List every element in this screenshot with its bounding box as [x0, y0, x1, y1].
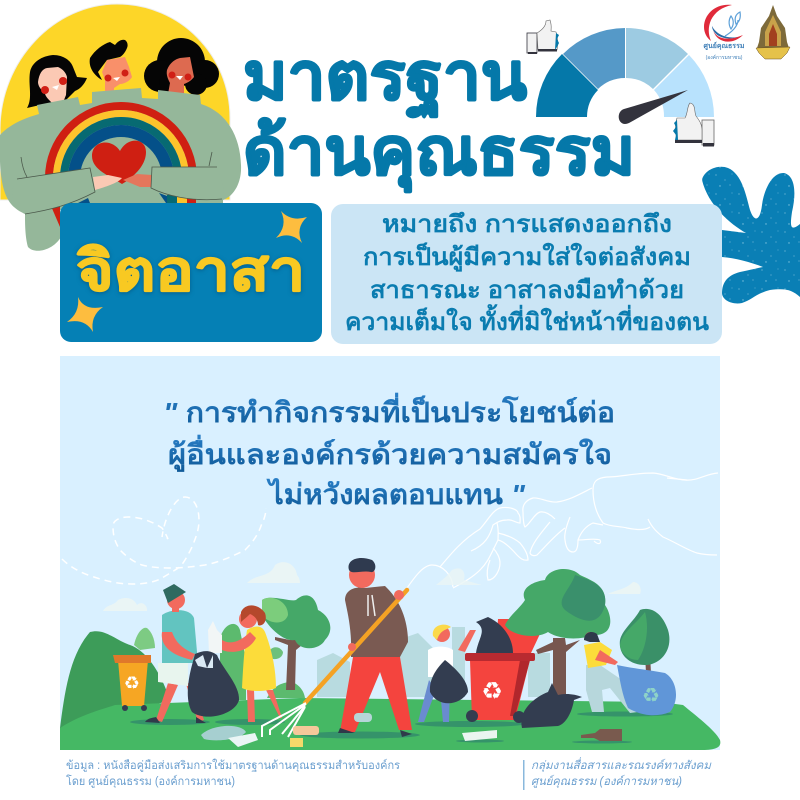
black bags ground: [521, 683, 582, 728]
source note: [66, 758, 400, 788]
credit: กลุ่มงานสื่อสารและรณรงค์ทางสังคม: [531, 757, 712, 772]
quote: [163, 392, 615, 510]
panel: term: [60, 203, 322, 342]
panel: definition: หมายถึง การแสดงออกถึง: [382, 211, 672, 238]
ground shadows: [130, 712, 673, 744]
blob decoration: [702, 167, 800, 303]
quote: " การทำกิจกรรมที่เป็นประโยชน์ต่อ: [163, 392, 615, 428]
small tree: [620, 609, 669, 673]
star top: [276, 211, 307, 243]
clouds: [103, 562, 641, 611]
red recycling bin: [465, 617, 547, 723]
bottle: [208, 621, 222, 653]
title: มาตรฐาน: [243, 39, 527, 119]
boy blond: [418, 625, 476, 722]
panel: definition: การเป็นผู้มีความใส่ใจต่อสังคม: [363, 242, 691, 272]
thumb up right: [673, 103, 714, 146]
heart: [92, 141, 146, 184]
rainbow lower ends: [51, 193, 196, 227]
hands: [93, 174, 152, 190]
title: ด้านคุณธรรม: [243, 114, 635, 193]
tree right: [505, 569, 610, 697]
credit: [523, 757, 712, 790]
logo: moral center: (องค์การมหาชน): [706, 54, 743, 61]
star bottom: [67, 297, 103, 332]
yellow circle backdrop: [0, 4, 230, 200]
city: [317, 627, 550, 697]
sleeves: [12, 152, 224, 214]
panel: quote and scene: [60, 356, 720, 750]
red recycling bin: ♻: [481, 678, 503, 705]
man with rake: [262, 558, 412, 737]
panel: definition: [331, 204, 722, 344]
title: [243, 39, 635, 193]
bush left: [60, 631, 170, 735]
credit: ศูนย์คุณธรรม (องค์การมหาชน): [531, 774, 682, 788]
thumb up left: [527, 20, 559, 54]
bush mid: [220, 624, 305, 700]
recycling bin yellow: [113, 655, 151, 711]
panel: definition: ความเต็มใจ ทั้งที่มิใช่หน้าที่ของตน: [345, 303, 710, 336]
quote: ไม่หวังผลตอบแทน ": [266, 478, 526, 510]
logo: moral center: ศูนย์คุณธรรม: [704, 41, 745, 51]
trash bag: [188, 651, 239, 717]
person left: [27, 55, 87, 108]
needle: [619, 90, 688, 124]
woman with bag: [584, 632, 676, 715]
logo: emblem: [756, 5, 790, 59]
hand outline: [407, 473, 718, 588]
term text: จิตอาสา: [76, 239, 305, 302]
source note: ข้อมูล : หนังสือคู่มือส่งเสริมการใช้มาตรฐานด้านคุณธรรมสำหรับองค์กร: [66, 758, 400, 772]
ground litter: [201, 713, 622, 747]
girl: [222, 605, 282, 722]
person middle: [90, 40, 132, 92]
boy with hat: [145, 584, 206, 723]
tree left: [262, 595, 330, 690]
quote: ผู้อื่นและองค์กรด้วยความสมัครใจ: [168, 434, 612, 472]
logo: moral center: [704, 5, 745, 61]
rainbow: [49, 106, 193, 250]
gauge: [527, 20, 714, 146]
person right: [144, 38, 219, 95]
illustration: three people with rainbow: [0, 4, 241, 251]
green body: [0, 88, 241, 251]
source note: โดย ศูนย์คุณธรรม (องค์การมหาชน): [66, 774, 235, 788]
woman with bag: ♻: [642, 685, 660, 707]
panel: definition: สาธารณะ อาสาลงมือทำด้วย: [370, 277, 684, 304]
dashed heart line: [62, 497, 266, 584]
ground: [60, 698, 720, 750]
recycling bin yellow: ♻: [124, 673, 140, 693]
